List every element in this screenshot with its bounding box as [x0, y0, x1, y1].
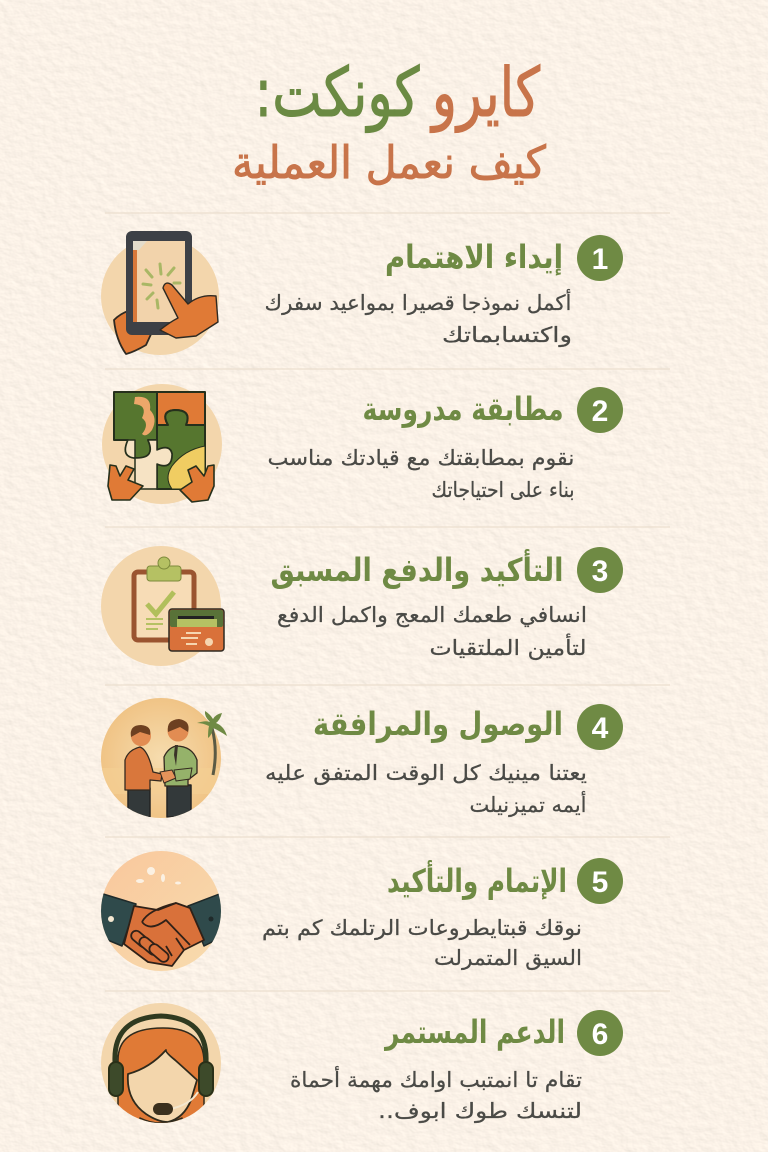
- description 2: نقوم بمطابقتك مع قيادتك مناسب: [268, 446, 574, 470]
- step 2: [102, 384, 623, 504]
- description 2: [268, 446, 574, 502]
- step 4: [101, 698, 623, 818]
- description 4: يعتنا مينيك كل الوقت المتفق عليه: [265, 761, 587, 785]
- heading 5: الإتمام والتأكيد: [387, 860, 567, 900]
- description 5: نوقك قبتايطروعات الرتلمك كم بتم: [262, 916, 582, 941]
- description 6: تقام تا انمتبب اوامك مهمة أحماة: [290, 1066, 582, 1092]
- number badge 3: [577, 547, 623, 593]
- number badge 1: [577, 235, 623, 281]
- number badge 6: 6: [592, 1018, 608, 1051]
- heading 1: إيداء الاهتمام: [385, 238, 563, 277]
- step 5: [98, 851, 623, 971]
- number badge 1: 1: [592, 243, 608, 276]
- number badge 5: [577, 858, 623, 904]
- description 3: [277, 603, 587, 660]
- palm tree: [197, 711, 227, 775]
- description 4: أيمه تميزنيلت: [470, 791, 586, 817]
- description 3: لتأمين الملتقيات: [430, 633, 586, 660]
- subtitle: how we work: كيف نعمل العملية: [232, 136, 547, 189]
- description 3: انسافي طعمك المعج واكمل الدفع: [277, 603, 587, 627]
- number badge 2: 2: [592, 395, 608, 428]
- heading 4: الوصول والمرافقة: [313, 705, 563, 743]
- heading 2: مطابقة مدروسة: [362, 390, 564, 428]
- number badge 2: [577, 387, 623, 433]
- description 5: [262, 916, 582, 970]
- step 6: [101, 1003, 623, 1135]
- number badge 3: 3: [592, 555, 608, 588]
- dividers: [105, 213, 670, 991]
- number badge 4: [577, 704, 623, 750]
- description 1: واكتسابماتك: [442, 323, 572, 347]
- description 4: [265, 761, 587, 817]
- icon: phone tap: [101, 231, 219, 355]
- description 1: أكمل نموذجا قصيرا بمواعيد سفرك: [264, 289, 572, 315]
- icon: handshake: [98, 851, 224, 971]
- title line: Cairo Connect: كايرو: [430, 54, 540, 133]
- number badge 4: 4: [592, 712, 609, 745]
- step 1: [101, 231, 623, 355]
- number badge 5: 5: [592, 866, 608, 899]
- description 2: بناء على احتياجاتك: [432, 478, 574, 502]
- heading 6: الدعم المستمر: [383, 1013, 565, 1051]
- description 6: [290, 1066, 582, 1123]
- icon: clipboard and card: [101, 546, 224, 666]
- description 5: السيق المتمرلت: [434, 946, 582, 970]
- step 3: [101, 546, 623, 666]
- description 1: [264, 289, 572, 347]
- description 6: لتنسك طوك ابوف..: [378, 1099, 582, 1123]
- icon: two men and palm: [101, 698, 227, 818]
- heading 3: التأكيد والدفع المسبق: [270, 549, 564, 589]
- title line: Cairo Connect: كونكت:: [254, 54, 420, 133]
- title: [232, 54, 547, 189]
- number badge 6: [577, 1010, 623, 1056]
- icon: puzzle: [102, 384, 222, 504]
- icon: support agent: [101, 1003, 221, 1135]
